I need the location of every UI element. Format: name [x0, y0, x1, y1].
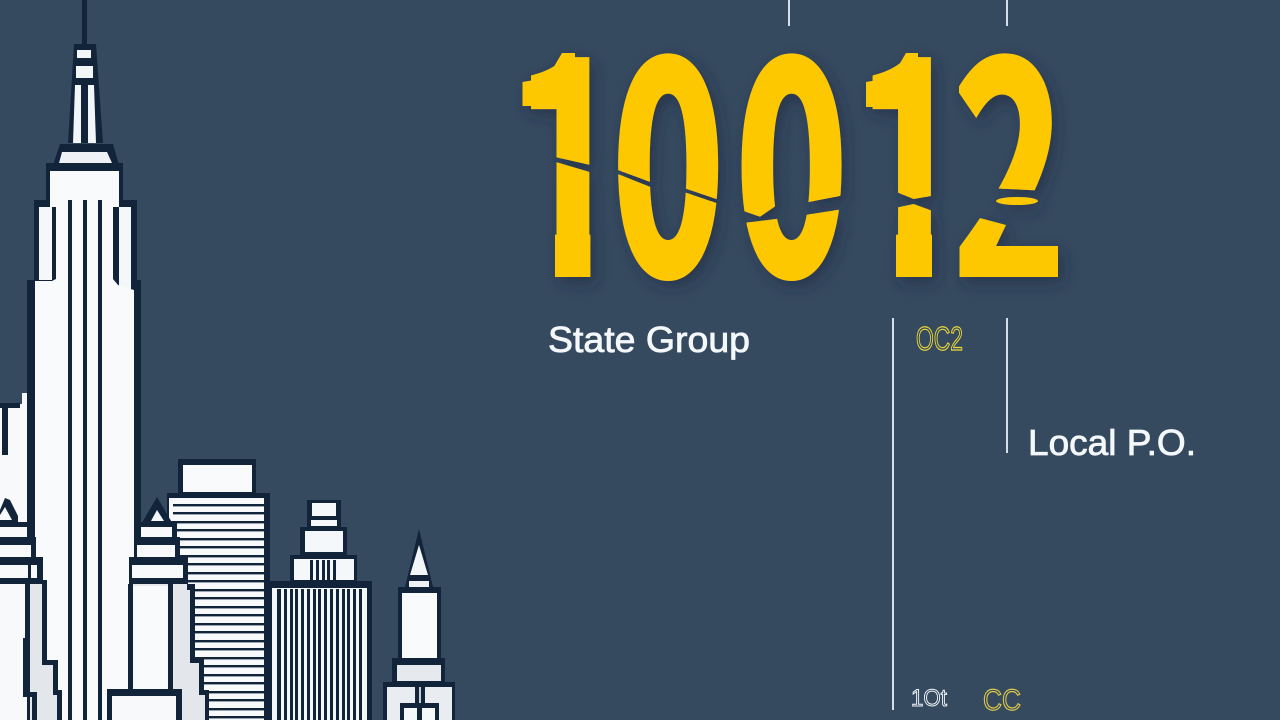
skyline illustration	[0, 0, 455, 720]
building: stepped spire	[107, 497, 209, 720]
small white code: 1Ot	[911, 685, 947, 712]
building: setback tower with vertical ribs	[270, 500, 372, 720]
headline number 10012	[522, 53, 1064, 288]
label: State Group: State Group	[548, 319, 750, 360]
building: left stepped tower	[0, 393, 62, 720]
building: empire state tower	[27, 0, 141, 720]
vertical divider: short	[1006, 318, 1008, 453]
vertical divider: tall	[892, 318, 894, 710]
top tick lines	[788, 0, 1008, 26]
small yellow code bottom: CC	[983, 684, 1021, 717]
building: striped slab	[167, 459, 270, 720]
label: Local P.O.: Local P.O.	[1028, 422, 1196, 463]
small yellow code: OC2	[916, 320, 963, 357]
building: pointed tower	[383, 529, 455, 720]
